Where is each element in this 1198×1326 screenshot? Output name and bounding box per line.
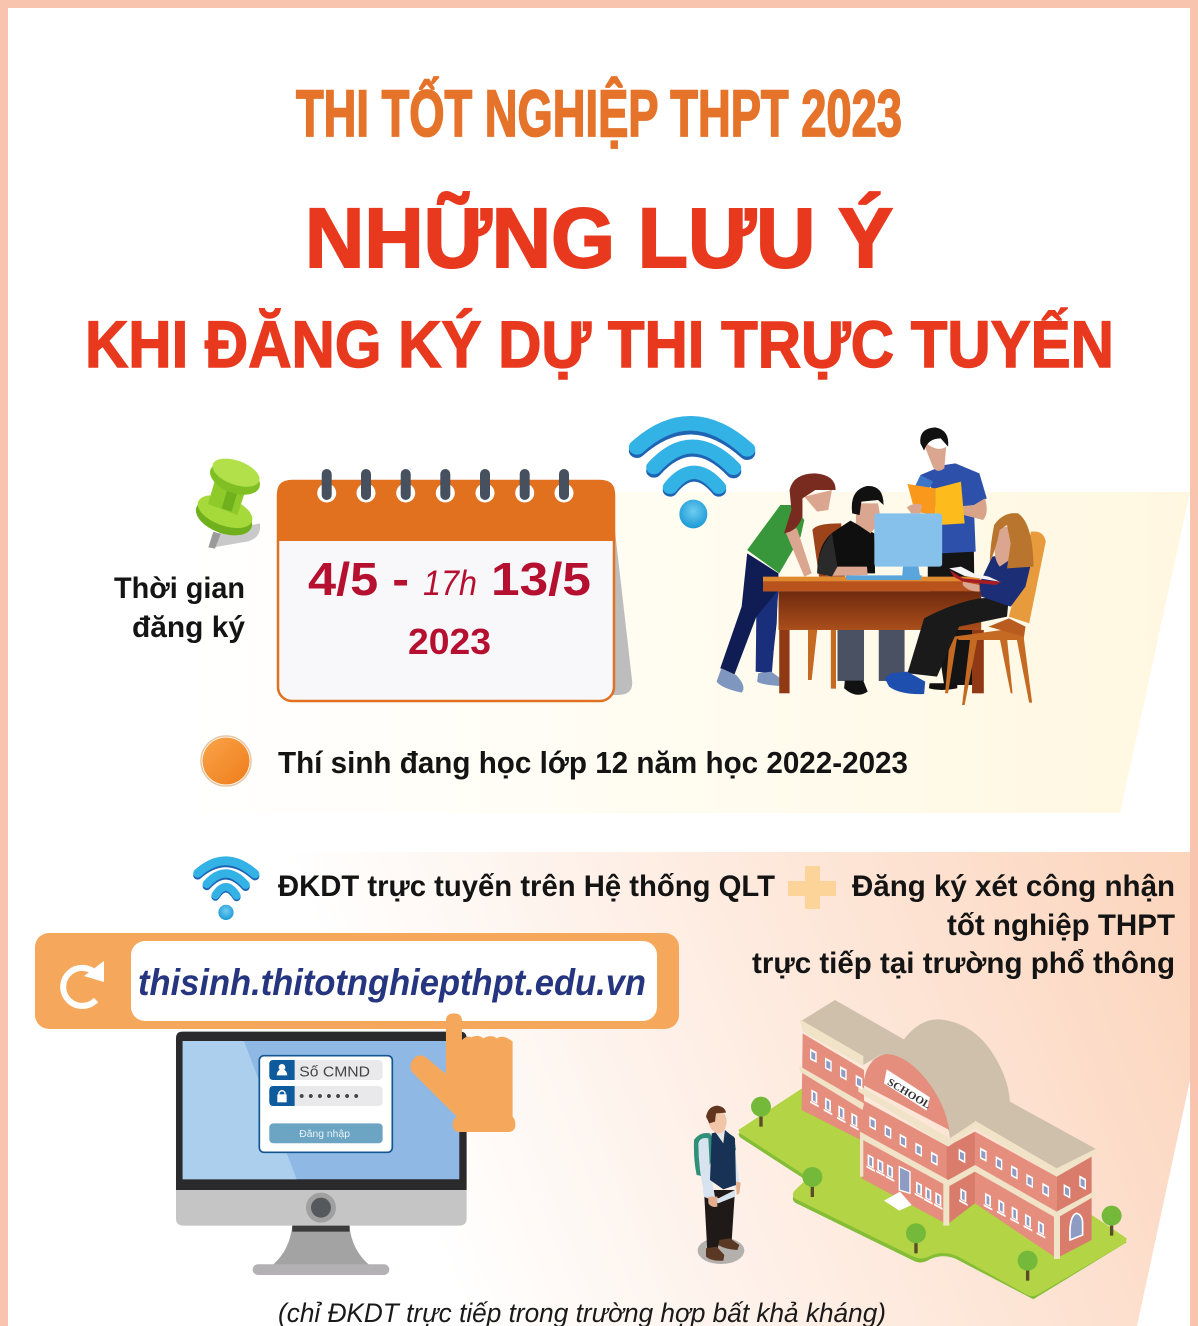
label: registration time: đăng ký: [132, 611, 245, 644]
label: registration time: Thời gian: [114, 572, 245, 605]
address bar: [35, 933, 679, 1029]
windows: [810, 1048, 1086, 1240]
text: graduation recognition: tốt nghiệp THPT: [947, 909, 1175, 942]
front trees: [906, 1223, 1038, 1281]
panel: registration background: [190, 492, 1190, 813]
cornice trim: [799, 1019, 1097, 1259]
icon: pointing hand: [411, 1013, 515, 1132]
monitor stand: [253, 1225, 389, 1275]
seated man: [812, 486, 905, 695]
back trees: [751, 1097, 1122, 1236]
table: [763, 575, 984, 693]
date range: 17h: [423, 564, 477, 603]
login form: [259, 1056, 392, 1152]
icon: large wifi: [637, 423, 747, 528]
monitor body: [176, 1032, 467, 1226]
desktop computer: [874, 513, 942, 578]
illustration: school building: [738, 1000, 1127, 1299]
panel: online registration background: [130, 852, 1190, 1326]
text: graduation recognition: trực tiếp tại trường phổ thông: [752, 947, 1175, 980]
text: online registration: ĐKDT trực tuyến trên Hệ thống QLT: [278, 870, 775, 903]
woman in green: [717, 473, 836, 693]
text: candidate group: Thí sinh đang học lớp 12 năm học 2022-2023: [278, 745, 908, 780]
title: subheading: KHI ĐĂNG KÝ DỰ THI TRỰC TUYẾN: [85, 307, 1114, 381]
school arch sign: SCHOOL: [885, 1077, 932, 1111]
icon: green push pin: [191, 453, 264, 549]
login form: •••••••: [299, 1087, 359, 1103]
date range: [308, 553, 591, 662]
illustration: students around computer: [717, 427, 1046, 705]
illustration: student: [694, 1106, 744, 1264]
grass lawn: [738, 1089, 1127, 1299]
seated woman: [885, 513, 1046, 705]
icon: plus: [788, 866, 836, 909]
desktop monitor with login form: [176, 1032, 467, 1275]
school arch sign: [863, 1054, 949, 1130]
calendar: [277, 474, 632, 701]
text: graduation recognition: Đăng ký xét công nhận: [852, 870, 1175, 903]
website address: thisinh.thitotnghiepthpt.edu.vn: [138, 962, 646, 1003]
walls: [802, 1033, 1092, 1258]
login form: Đăng nhập: [299, 1129, 350, 1140]
text: graduation recognition: [752, 870, 1175, 980]
icon: orange bullet: [201, 736, 251, 786]
title: main heading: NHỮNG LƯU Ý: [305, 191, 893, 285]
open book: [907, 482, 965, 525]
label: registration time: [114, 572, 245, 644]
date range: 13/5: [491, 553, 591, 605]
icon: refresh arrow: [63, 961, 104, 1006]
calendar rings: [317, 474, 574, 502]
icon: small wifi: [198, 861, 255, 920]
login form: Số CMND: [299, 1063, 370, 1080]
date range: 2023: [408, 621, 491, 662]
title: exam name: THI TỐT NGHIỆP THPT 2023: [296, 76, 902, 150]
roof: [800, 1000, 1097, 1172]
standing man: [915, 427, 987, 690]
date range: 4/5 -: [308, 553, 409, 605]
